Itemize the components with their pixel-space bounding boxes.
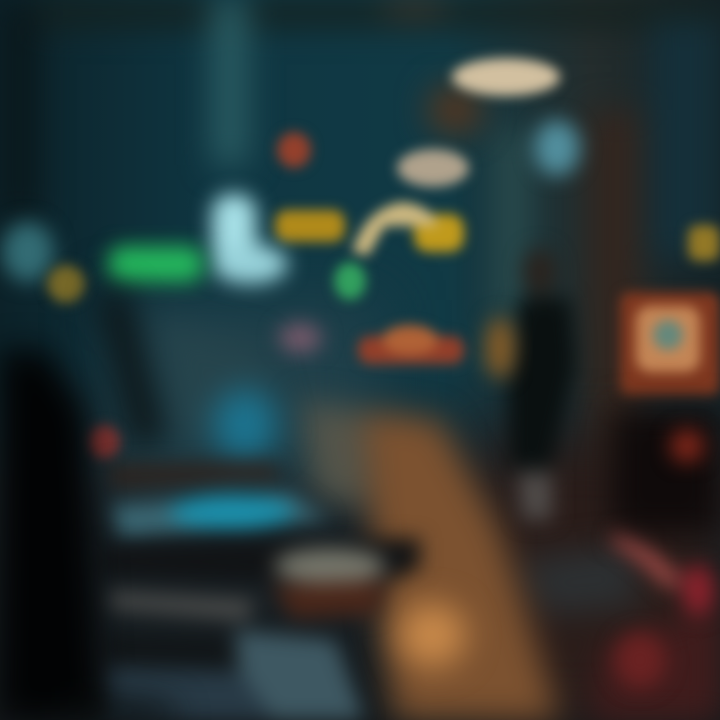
laptop screen shape — [98, 290, 285, 461]
dark cabinet with red light — [612, 410, 720, 532]
left yellow sign — [47, 265, 85, 303]
pink glow — [278, 323, 322, 353]
pale blue neon — [212, 194, 288, 284]
left teal glow — [2, 222, 54, 282]
red floor reflections — [614, 535, 714, 688]
framed orange panel — [620, 292, 720, 396]
orange tray / counter display — [358, 325, 464, 364]
small red light — [88, 425, 120, 459]
ceiling and upper wall tones — [0, 0, 720, 510]
pendant lamp large — [427, 58, 560, 136]
lower room shade — [0, 360, 720, 720]
standing figure — [508, 248, 576, 520]
red lantern — [277, 132, 311, 168]
lower room base — [110, 300, 720, 720]
blue table surface — [105, 463, 330, 538]
green small neon — [334, 262, 366, 300]
floor: warm glow — [300, 400, 720, 720]
yellow sign far right — [688, 225, 720, 261]
foreground dark silhouette — [0, 350, 180, 720]
yellow neon sign — [275, 202, 464, 256]
pendant lamp small — [397, 149, 469, 187]
floor highlight — [398, 603, 466, 667]
green neon sign — [108, 246, 204, 282]
blue window glow — [534, 120, 580, 176]
amber glow beside figure — [485, 317, 515, 379]
foreground bowl and dark bands — [100, 538, 420, 720]
